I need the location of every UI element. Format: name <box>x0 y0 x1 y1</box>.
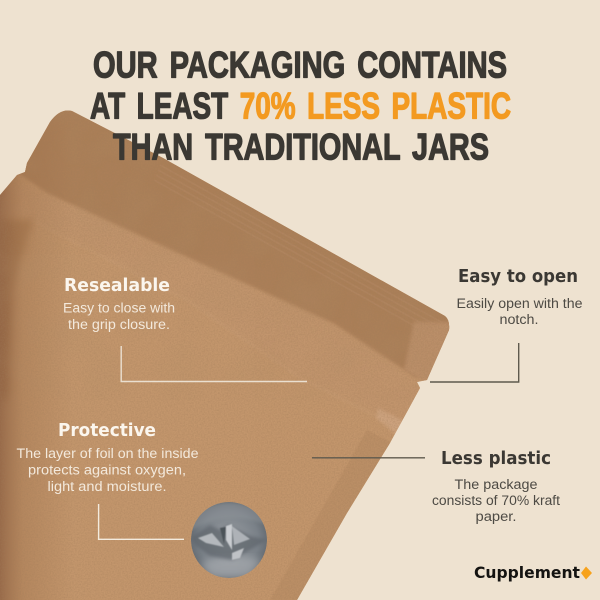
callout: resealable <box>63 275 307 382</box>
resealable description: Easy to close with <box>63 300 175 316</box>
zipper fold strip <box>400 382 420 424</box>
heading <box>90 44 511 168</box>
pouch body <box>0 100 460 600</box>
easy to open leader line <box>430 343 519 382</box>
less plastic title: Less plastic <box>441 448 551 469</box>
heading line 3: THAN TRADITIONAL JARS <box>113 126 489 168</box>
protective description: light and moisture. <box>48 479 166 494</box>
less plastic leader line <box>312 457 425 459</box>
paper grain <box>26 188 449 600</box>
brand logo <box>474 563 592 582</box>
zipper crease line <box>33 221 400 428</box>
resealable title: Resealable <box>64 275 170 296</box>
foil sample circle <box>191 502 267 578</box>
left dark inner panel shade <box>4 220 32 336</box>
right side seal <box>297 442 390 600</box>
callout: less plastic <box>312 448 560 524</box>
left shading <box>0 172 46 600</box>
brand name: Cupplement <box>474 563 580 582</box>
heading line 2: AT LEAST 70% LESS PLASTIC <box>90 86 511 126</box>
top band above the fold <box>20 110 450 370</box>
callout: protective <box>16 420 198 539</box>
kraft paper pouch <box>0 100 460 600</box>
protective title: Protective <box>58 420 156 441</box>
callout: easy to open <box>430 266 582 382</box>
less plastic description: consists of 70% kraft <box>432 493 560 508</box>
highlight near notch <box>376 410 402 434</box>
protective leader line <box>99 504 184 539</box>
easy to open description: Easily open with the <box>456 296 582 311</box>
brand diamond icon <box>581 566 592 580</box>
protective description: protects against oxygen, <box>28 462 186 478</box>
easy to open description <box>456 296 582 327</box>
resealable description <box>63 300 175 332</box>
easy to open title: Easy to open <box>458 266 578 287</box>
top edge seal ridges <box>154 165 443 338</box>
easy to open description: notch. <box>500 312 538 327</box>
less plastic description: paper. <box>476 509 516 524</box>
protective description: The layer of foil on the inside <box>16 446 198 461</box>
resealable description: the grip closure. <box>68 317 170 332</box>
paper mottling <box>0 100 460 400</box>
resealable leader line <box>121 346 307 382</box>
less plastic description: The package <box>454 477 538 492</box>
lighter right end of the top band <box>404 322 450 381</box>
less plastic description <box>432 477 560 524</box>
protective description <box>16 446 198 494</box>
